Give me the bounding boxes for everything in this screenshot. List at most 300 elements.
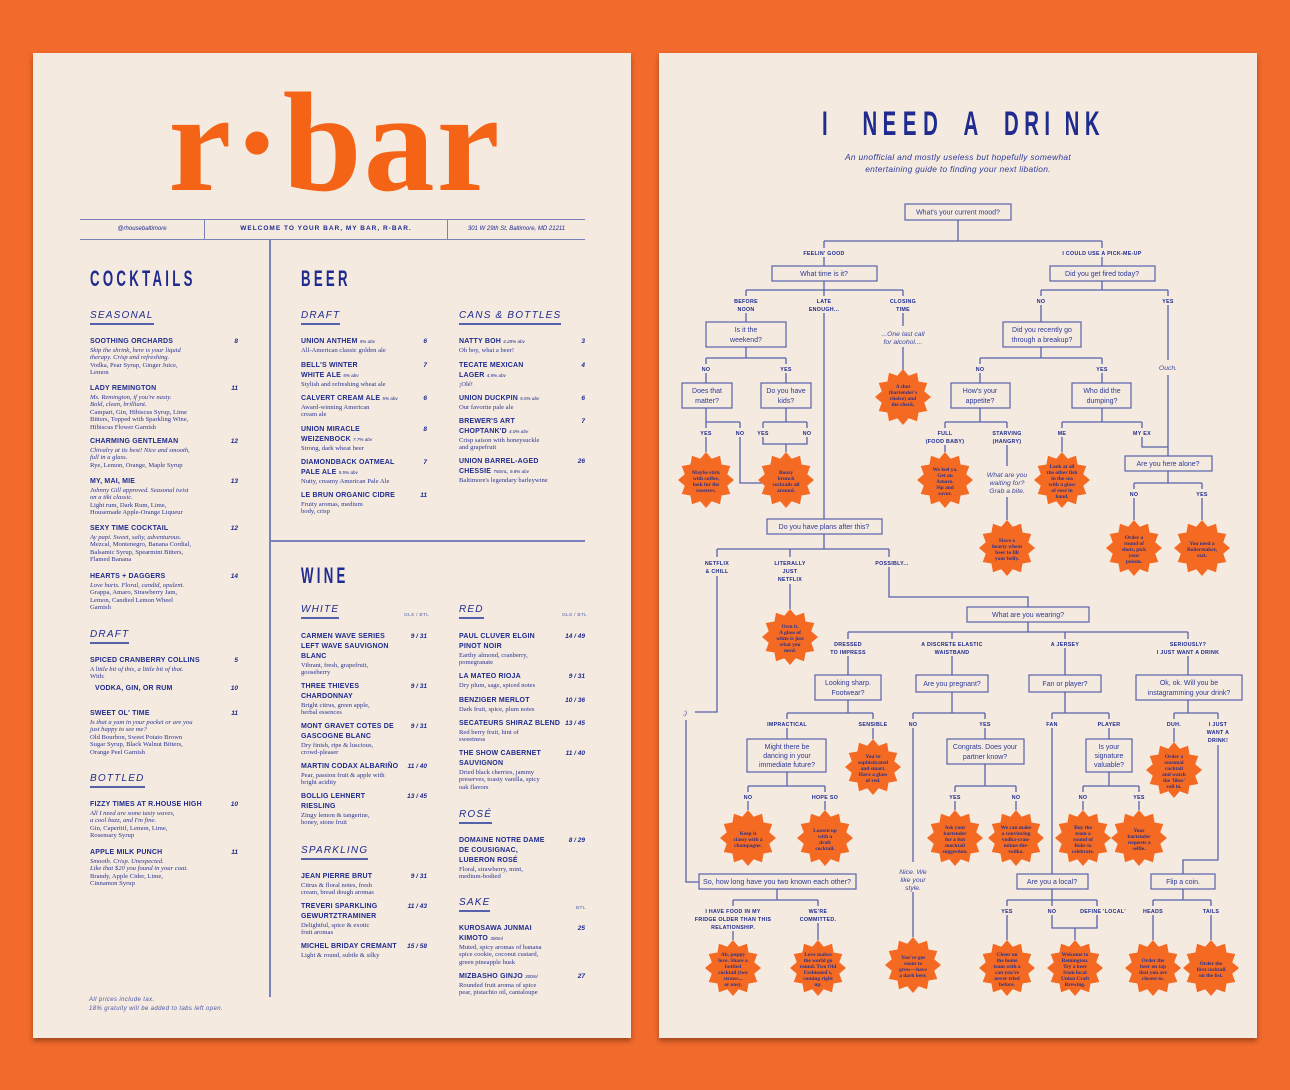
- answer bursts: [678, 369, 1239, 996]
- burst: white wine: [762, 609, 818, 665]
- q: known: So, how long have you two known each other?: [703, 879, 851, 886]
- burst: wheat beer: Have a: [999, 538, 1015, 544]
- answer labels: LITERALLY: [774, 561, 806, 567]
- burst: fish: the other fish: [1047, 470, 1077, 476]
- item: hearts + daggers: Garnish: [90, 604, 111, 611]
- burst: selfie: bartender: [1127, 834, 1151, 840]
- item: carmen wave: 9 / 31: [411, 633, 427, 640]
- item: soothing orchards: 8: [234, 338, 238, 345]
- item: my mai mie: Light rum, Dark Rum, Lime,: [90, 502, 166, 509]
- q: breakup: Did you recently go: [1012, 327, 1072, 334]
- burst: red: and smart.: [861, 766, 886, 772]
- item: kurosawa: spice cookie, coconut custard,: [459, 951, 538, 958]
- item: bell's winter white: Stylish and refreshing wheat ale: [301, 381, 386, 388]
- answer labels: TIME: [896, 307, 910, 313]
- burst: home team: never tried: [994, 976, 1020, 982]
- item: secateurs: [459, 720, 586, 743]
- burst: remington: Remington.: [1062, 958, 1089, 964]
- footer note: [88, 996, 223, 1012]
- q: breakup: [1003, 322, 1081, 347]
- item: charming gentleman: Rye, Lemon, Orange, Maple Syrup: [90, 462, 183, 469]
- burst: shots: round of: [1124, 541, 1144, 547]
- item: union anthem: [301, 338, 427, 354]
- q: kids: kids?: [778, 398, 794, 405]
- burst: boozy brunch: around.: [777, 488, 796, 494]
- item: le brun: Fruity aromas, medium: [301, 501, 363, 508]
- item: kurosawa: Muted, spicy aromas of banana: [459, 944, 542, 951]
- item: bollig lehnert: Zingy lemon & tangerine,: [301, 812, 369, 819]
- item: kurosawa: green pineapple husk: [459, 959, 515, 966]
- item: jean pierre: 9 / 31: [411, 873, 427, 880]
- item: mont gravet: 9 / 31: [411, 723, 427, 730]
- item: michel briday: MICHEL BRIDAY CREMANT: [301, 943, 397, 950]
- heading: cocktails: COCKTAILS: [90, 266, 196, 291]
- panel: flowchart: [659, 53, 1257, 1038]
- q: local: [1017, 874, 1088, 889]
- burst: boozy brunch: brunch: [778, 476, 794, 482]
- item: union anthem: 6: [423, 338, 427, 345]
- item: union anthem: UNION ANTHEM 5% abv: [301, 338, 375, 345]
- burst: white wine: what you: [779, 642, 801, 648]
- item: hearts + daggers: HEARTS + DAGGERS: [90, 573, 165, 580]
- burst: dark beer: You've got: [901, 955, 925, 961]
- item: tecate: ¡Olé!: [459, 381, 473, 388]
- item: michel briday: Light & round, subtle & silky: [301, 952, 379, 959]
- item: soothing orchards: [90, 338, 238, 376]
- item: lady remington: Campari, Gin, Hibiscus Syrup, Lime: [90, 409, 187, 416]
- burst: mocktail: mocktail: [945, 843, 966, 849]
- burst: bohs: team a: [1075, 831, 1091, 837]
- item: calvert cream ale: cream ale: [301, 411, 326, 418]
- item: jean pierre: cream, bread dough aromas: [301, 889, 374, 896]
- answer labels: A JERSEY: [1051, 642, 1079, 648]
- q: dumping: [1072, 383, 1131, 408]
- q: kids: Do you have: [766, 388, 806, 395]
- q: alone: [1125, 456, 1212, 471]
- item: bell's winter white: WHITE ALE 5% abv: [301, 372, 359, 379]
- answer labels: MY EX: [1133, 431, 1151, 437]
- item: diamondback: DIAMONDBACK OATMEAL: [301, 459, 394, 466]
- answer labels: NO: [1130, 492, 1138, 498]
- item: chessie: CHESSIE 750mL, 9.8% abv: [459, 468, 529, 475]
- burst: old fashioneds: coming right: [803, 976, 833, 982]
- item: brewer's art: BREWER'S ART: [459, 418, 515, 425]
- burst: seasonal cocktail: and watch: [1162, 772, 1186, 778]
- burst: old fashioneds: Love makes: [804, 952, 832, 958]
- q: dumping: Who did the: [1083, 388, 1121, 395]
- answer labels: YES: [1096, 367, 1108, 373]
- item: la mateo: Dry plum, sage, spiced notes: [459, 682, 535, 689]
- burst: shot: choice) and: [890, 395, 916, 402]
- answer labels: I JUST WANT A DRINK: [1157, 650, 1219, 656]
- burst: coffee: Maybe stick: [692, 470, 720, 476]
- answer labels: STARVING: [992, 431, 1022, 437]
- item: paul cluver: 14 / 49: [565, 633, 585, 640]
- item: apple milk punch: Smooth. Crisp. Unexpected.: [90, 858, 164, 865]
- burst: coffee: [678, 452, 734, 508]
- answer labels: [695, 251, 1229, 931]
- answer labels: WANT A: [1207, 730, 1229, 736]
- answer labels: I JUST: [1209, 722, 1228, 728]
- burst: amaro: [917, 452, 973, 508]
- q: dumping: dumping?: [1087, 398, 1117, 405]
- item: paul cluver: [459, 633, 585, 666]
- burst: bohs: celebrate.: [1072, 849, 1095, 855]
- item: show cabernet: THE SHOW CABERNET: [459, 750, 541, 757]
- burst: draft cocktail: draft: [819, 840, 831, 846]
- item: domaine notre dame: [459, 837, 585, 880]
- item: three thieves: THREE THIEVES: [301, 683, 359, 690]
- item: lady remington: Hibiscus Flower Garnish: [90, 424, 156, 431]
- burst: old fashioneds: [790, 940, 846, 996]
- answer labels: HEADS: [1143, 909, 1163, 915]
- q: partner: [947, 739, 1024, 764]
- burst: shots: Order a: [1125, 535, 1143, 541]
- item: three thieves: herbal essences: [301, 709, 342, 716]
- answer labels: JUST: [783, 569, 798, 575]
- item: calvert cream ale: CALVERT CREAM ALE 5% abv: [301, 395, 398, 402]
- burst: mocktail: for a fun: [945, 837, 965, 843]
- item: brewer's art: CHOPTANK'D 4.0% abv: [459, 428, 528, 435]
- item: tecate: TECATE MEXICAN: [459, 362, 524, 369]
- burst: bohs: round of: [1073, 837, 1093, 843]
- burst: dark beer: grow—have: [899, 967, 927, 973]
- q: fan or player: Fan or player?: [1042, 681, 1088, 688]
- burst: fish: hand.: [1055, 494, 1069, 500]
- answer labels: NO: [1037, 299, 1045, 305]
- answer labels: YES: [979, 722, 991, 728]
- item: spiced cranberry collins: 5: [234, 657, 238, 664]
- burst: heads: that you are: [1139, 970, 1167, 976]
- item: apple milk punch: APPLE MILK PUNCH: [90, 849, 162, 856]
- burst: red: sophisticated: [858, 760, 888, 766]
- q: appetite: [951, 383, 1010, 408]
- answer labels: (HANGRY): [993, 439, 1021, 445]
- burst: coffee: roosters.: [696, 488, 717, 494]
- header: handle: @rhousebaltimore: [117, 226, 167, 232]
- answer labels: RELATIONSHIP.: [711, 925, 755, 931]
- item: mont gravet: crowd-pleaser: [301, 749, 338, 756]
- answer labels: I HAVE FOOD IN MY: [705, 909, 761, 915]
- q: weekend: Is it the: [735, 327, 757, 334]
- item: carmen wave: BLANC: [301, 653, 326, 660]
- item: kurosawa: KIMOTO 300ml: [459, 935, 503, 942]
- q: signature: [1086, 739, 1132, 772]
- burst: boilermaker: stat.: [1197, 553, 1208, 559]
- q: weekend: [706, 322, 786, 347]
- item: diamondback: Nutty, creamy American Pale Ale: [301, 478, 389, 485]
- item: spiced cranberry collins: [90, 657, 238, 692]
- q: footwear: Looking sharp.: [825, 680, 871, 687]
- item: mont gravet: [301, 723, 427, 756]
- subheading: seasonal: SEASONAL: [90, 310, 154, 321]
- italic asides: ;): [683, 710, 687, 717]
- answer labels: TO IMPRESS: [830, 650, 866, 656]
- burst: white wine: white is just: [776, 636, 804, 642]
- q: partner: partner know?: [963, 754, 1007, 761]
- q: fired: [1050, 266, 1155, 281]
- burst: seasonal cocktail: seasonal: [1164, 760, 1184, 766]
- item: tecate: [459, 362, 585, 388]
- item: natty boh: Oh boy, what a beer!: [459, 347, 514, 354]
- answer labels: FRIDGE OLDER THAN THIS: [695, 917, 771, 923]
- item: diamondback: [301, 459, 428, 485]
- item: charming gentleman: 12: [231, 438, 238, 445]
- italic asides: Grab a bite.: [989, 488, 1025, 495]
- item: union miracle: [301, 426, 427, 452]
- item: three thieves: Bright citrus, green apple,: [301, 702, 370, 709]
- answer labels: FEELIN' GOOD: [803, 251, 845, 257]
- burst: coffee: with coffee,: [693, 476, 720, 482]
- burst: heads: closest to.: [1142, 976, 1165, 982]
- item: lady remington: Bitters, Topped with Sparkling Wine,: [90, 416, 188, 423]
- item: domaine notre dame: DE COUSIGNAC,: [459, 847, 518, 854]
- burst: fish: [1034, 452, 1090, 508]
- label: gls/btl red: GLS / BTL: [562, 613, 587, 618]
- burst: red: Have a glass: [859, 772, 887, 778]
- footer note: 18% gratuity will be added to tabs left open.: [89, 1006, 223, 1012]
- burst: wheat beer: hearty wheat: [992, 544, 1022, 550]
- answer labels: & CHILL: [706, 569, 729, 575]
- burst: puppy love: [705, 940, 761, 996]
- item: calvert cream ale: 6: [423, 395, 427, 402]
- q: matter: Does that: [692, 388, 722, 395]
- item: fizzy times: 10: [231, 801, 238, 808]
- item: hearts + daggers: Lemon, Candied Lemon Wheel: [90, 597, 173, 604]
- label: btl sake: BTL: [576, 906, 586, 911]
- item: union miracle: UNION MIRACLE: [301, 426, 360, 433]
- item: le brun: LE BRUN ORGANIC CIDRE: [301, 492, 395, 499]
- burst: heads: [1125, 940, 1181, 996]
- burst: seasonal cocktail: roll in.: [1166, 784, 1182, 790]
- item: my mai mie: on a tiki classic.: [90, 494, 133, 501]
- answer labels: A DISCRETE ELASTIC: [921, 642, 983, 648]
- item: natty boh: [459, 338, 585, 354]
- item: martin codax: 11 / 40: [408, 763, 427, 770]
- burst: fish: Look at all: [1050, 464, 1075, 470]
- item: chessie: 26: [578, 458, 585, 465]
- burst: home team: [979, 940, 1035, 996]
- burst: seasonal cocktail: [1146, 742, 1202, 798]
- item: sexy time cocktail: [90, 525, 238, 563]
- item: charming gentleman: [90, 438, 238, 469]
- item: martin codax: bright acidity: [301, 779, 336, 786]
- q: plans: Do you have plans after this?: [779, 524, 869, 531]
- burst: vodka-cran: vodka-cran-: [1002, 837, 1030, 843]
- item: diamondback: PALE ALE 5.5% abv: [301, 469, 358, 476]
- item: le brun: body, crisp: [301, 508, 330, 515]
- burst: bohs: Bohs to: [1074, 843, 1092, 849]
- item: lady remington: [90, 385, 238, 431]
- subheading: bottled: BOTTLED: [90, 773, 145, 784]
- heading: beer: BEER: [301, 266, 351, 291]
- answer labels: SERIOUSLY?: [1170, 642, 1206, 648]
- q: instagram: instagramming your drink?: [1148, 690, 1230, 697]
- burst: selfie: requests a: [1127, 840, 1151, 846]
- item: soothing orchards: Skip the shrink, here is your liquid: [90, 347, 181, 354]
- burst: vodka-cran: vodka.: [1008, 849, 1024, 855]
- q: flip: [1151, 874, 1215, 889]
- item: domaine notre dame: medium-bodied: [459, 873, 501, 880]
- item: mont gravet: MONT GRAVET COTES DE: [301, 723, 394, 730]
- burst: bohs: [1055, 810, 1111, 866]
- item: show cabernet: [459, 750, 585, 791]
- item: chessie: [459, 458, 585, 484]
- italic asides: ...One last call: [881, 331, 925, 338]
- item: lady remington: Ms. Remington, if you're nasty.: [90, 394, 172, 401]
- item: three thieves: [301, 683, 427, 716]
- item: carmen wave: gooseberry: [301, 669, 330, 676]
- item: my mai mie: MY, MAI, MIE: [90, 478, 135, 485]
- burst: amaro: Sip and: [936, 485, 954, 491]
- item: la mateo: 9 / 31: [569, 673, 585, 680]
- burst: shot: A shot: [896, 384, 910, 390]
- item: bollig lehnert: RIESLING: [301, 803, 336, 810]
- burst: vodka-cran: We can make: [1001, 825, 1032, 831]
- item: domaine notre dame: Floral, strawberry, mint,: [459, 866, 523, 873]
- item: paul cluver: pomegranate: [459, 659, 493, 666]
- item: union miracle: 8: [423, 426, 427, 433]
- answer labels: BEFORE: [734, 299, 758, 305]
- answer labels: I COULD USE A PICK-ME-UP: [1062, 251, 1142, 257]
- item: mizbasho: MIZBASHO GINJO 300ml: [459, 973, 538, 980]
- subheading: red: RED: [459, 604, 484, 615]
- burst: home team: Cheer on: [996, 952, 1018, 958]
- item: brewer's art: Crisp saison with honeysuckle: [459, 437, 539, 444]
- burst: shot: the check.: [891, 402, 915, 408]
- item: sweet ol' time: Old Bourbon, Sweet Potato Brown: [90, 734, 182, 741]
- burst: puppy love: bottled: [725, 964, 741, 970]
- item: apple milk punch: Brandy, Apple Cider, Lime,: [90, 873, 163, 880]
- answer labels: IMPRACTICAL: [767, 722, 807, 728]
- answer labels: YES: [1001, 909, 1013, 915]
- item: tecate: LAGER 4.5% abv: [459, 372, 506, 379]
- burst: white wine: need.: [784, 648, 797, 654]
- item: treveri: GEWURTZTRAMINER: [301, 913, 376, 920]
- item: natty boh: NATTY BOH 4.28% abv: [459, 338, 525, 345]
- item: michel briday: [301, 943, 427, 959]
- italic asides: like your: [900, 877, 926, 884]
- item: sweet ol' time: SWEET OL' TIME: [90, 710, 150, 717]
- answer labels: SENSIBLE: [859, 722, 888, 728]
- q: footwear: [815, 675, 881, 700]
- item: martin codax: Pear, passion fruit & apple with: [301, 772, 385, 779]
- answer labels: YES: [1133, 795, 1145, 801]
- burst: amaro: We feel ya.: [932, 467, 958, 473]
- item: sexy time cocktail: Balsamic Syrup, Spearmint Bitters,: [90, 549, 183, 556]
- answer labels: LATE: [817, 299, 831, 305]
- subheading: sake: SAKE: [459, 897, 490, 908]
- item: domaine notre dame: DOMAINE NOTRE DAME: [459, 837, 545, 844]
- item: paul cluver: PAUL CLUVER ELGIN: [459, 633, 535, 640]
- burst: remington: from local: [1063, 970, 1087, 976]
- burst: home team: before.: [999, 982, 1016, 988]
- item: my mai mie: Johnny Gill approved. Seasonal twist: [90, 487, 188, 494]
- item: charming gentleman: Chivalry at its best! Nice and smooth,: [90, 447, 190, 454]
- q: instagram: Ok, ok. Will you be: [1160, 680, 1218, 687]
- item: sweet ol' time: Sugar Syrup, Black Walnut Bitters,: [90, 741, 183, 748]
- item: kurosawa: 25: [578, 925, 585, 932]
- panel: menu: [33, 53, 631, 1038]
- item: spiced cranberry collins: A little bit of this, a little bit of that.: [90, 666, 183, 673]
- item: lady remington: 11: [231, 385, 238, 392]
- burst: remington: Try a beer: [1063, 964, 1088, 970]
- connectors: [686, 220, 1218, 940]
- item: hearts + daggers: Love hurts. Floral, candid, opulent.: [90, 582, 184, 589]
- burst: remington: Brewing.: [1065, 982, 1086, 988]
- burst: fish: in the sea: [1051, 476, 1073, 482]
- q: mood: [905, 204, 1011, 220]
- burst: vodka-cran: minus-the-: [1004, 843, 1029, 849]
- item: three thieves: CHARDONNAY: [301, 693, 353, 700]
- q: signature: signature: [1095, 753, 1124, 760]
- burst: seasonal cocktail: cocktail: [1165, 766, 1183, 772]
- item: secateurs: 13 / 45: [565, 720, 585, 727]
- item: sweet ol' time: just happy to see me?: [90, 726, 147, 733]
- q: plans: [767, 519, 882, 534]
- burst: amaro: Amaro.: [936, 479, 954, 485]
- burst: mocktail: suggestion.: [942, 849, 968, 855]
- burst: draft cocktail: Loosen up: [813, 828, 837, 834]
- q: mood: What's your current mood?: [916, 210, 1000, 216]
- item: benziger: 10 / 36: [565, 697, 585, 704]
- italic asides: Ouch.: [1159, 365, 1177, 372]
- header: address: 301 W 29th St, Baltimore, MD 21211: [468, 226, 565, 232]
- q: partner: Congrats. Does your: [953, 744, 1018, 751]
- burst: boilermaker: You need a: [1189, 541, 1215, 547]
- burst: fish: of rosé in: [1051, 488, 1073, 494]
- item: calvert cream ale: [301, 395, 427, 418]
- answer labels: NETFLIX: [778, 577, 802, 583]
- burst: white wine: A glass of: [779, 630, 801, 636]
- burst: puppy love: straws...: [723, 976, 743, 982]
- item: treveri: fruit aromas: [301, 929, 333, 936]
- burst: remington: Union Craft: [1061, 976, 1089, 982]
- item: paul cluver: PINOT NOIR: [459, 643, 502, 650]
- item: show cabernet: 11 / 40: [566, 750, 585, 757]
- answer labels: NETFLIX: [705, 561, 729, 567]
- item: mizbasho: [459, 973, 586, 996]
- item: three thieves: 9 / 31: [411, 683, 427, 690]
- burst: champagne: [720, 810, 776, 866]
- item: bollig lehnert: 13 / 45: [407, 793, 427, 800]
- burst: mocktail: bartender: [943, 831, 967, 837]
- subheading: draft beer: DRAFT: [301, 310, 340, 321]
- burst: shots: [1106, 520, 1162, 576]
- q: footwear: Footwear?: [831, 690, 865, 697]
- q: matter: [682, 383, 732, 408]
- item: treveri: 11 / 43: [408, 903, 427, 910]
- item: sexy time cocktail: Flamed Banana: [90, 556, 131, 563]
- burst: old fashioneds: Fashioned's,: [804, 970, 833, 976]
- item: kurosawa: KUROSAWA JUNMAI: [459, 925, 532, 932]
- item: fizzy times: a cool buzz, and I'm fine.: [90, 817, 156, 824]
- answer labels: POSSIBLY...: [875, 561, 909, 567]
- burst: old fashioneds: round. Two Old: [800, 964, 836, 970]
- answer labels: NO: [976, 367, 984, 373]
- item: treveri: Delightful, spice & exotic: [301, 922, 369, 929]
- burst: boozy brunch: [758, 452, 814, 508]
- answer labels: DUH.: [1167, 722, 1181, 728]
- burst: puppy love: Ah, puppy: [721, 952, 745, 958]
- header: handle: [80, 219, 205, 239]
- burst: wheat beer: [979, 520, 1035, 576]
- q: wearing: [967, 607, 1089, 622]
- item: my mai mie: 13: [231, 478, 238, 485]
- answer labels: NO: [1048, 909, 1056, 915]
- burst: selfie: [1111, 810, 1167, 866]
- item: la mateo: [459, 673, 585, 689]
